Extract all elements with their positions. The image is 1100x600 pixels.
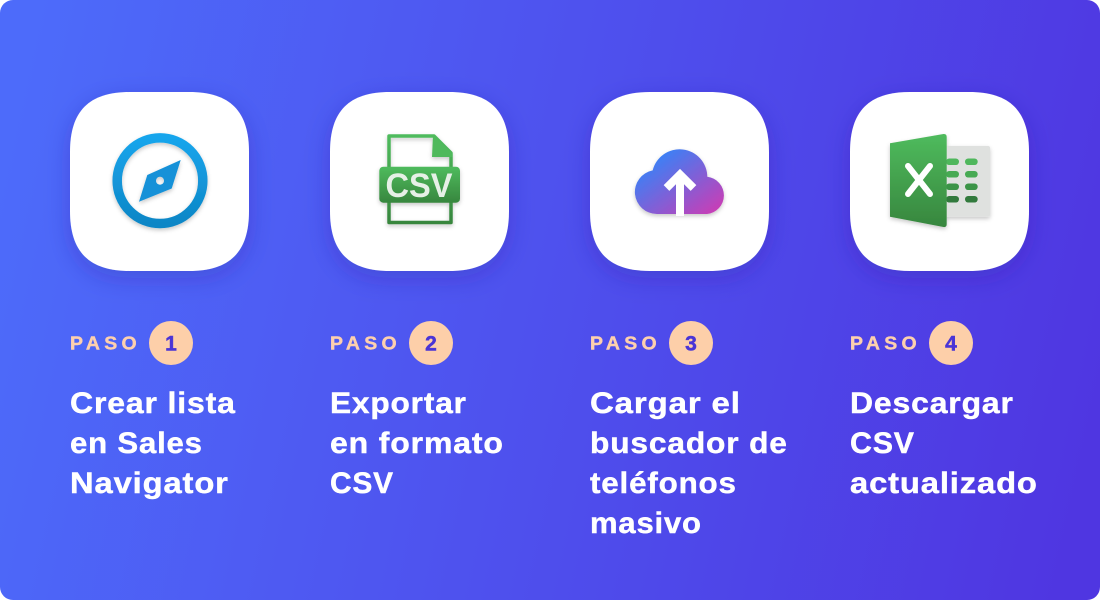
number badge 1: 1 [165,332,177,356]
icon: csv file [379,135,460,222]
number badge 4: 4 [945,332,957,356]
icon: compass [117,138,203,224]
number badge 3 [669,321,713,365]
step text 2 [330,387,504,500]
step 3 [590,92,788,540]
number badge 4 [929,321,973,365]
icon tile 1 [70,92,249,271]
step text 3: buscador de [590,427,788,460]
step text 3 [590,387,788,540]
step text 1 [70,387,236,500]
step label 1: PASO [70,334,141,354]
step text 3: masivo [590,507,702,540]
icon tile 3 [590,92,769,271]
step text 4: Descargar [850,387,1014,420]
icon: cloud upload [635,149,724,216]
step text 2: en formato [330,427,504,460]
number badge 3: 3 [685,332,697,356]
number badge 2 [409,321,453,365]
step text 4: actualizado [850,467,1038,500]
step text 3: Cargar el [590,387,741,420]
step text 3: teléfonos [590,467,737,500]
step text 2: CSV [330,467,394,500]
step text 1: Crear lista [70,387,236,420]
step text 1: Navigator [70,467,229,500]
step 1 [70,92,249,500]
icon tile 2 [330,92,509,271]
step 2 [330,92,509,500]
step text 1: en Sales [70,427,203,460]
number badge 2: 2 [425,332,437,356]
step label 4: PASO [850,334,921,354]
step label 3: PASO [590,334,661,354]
step text 2: Exportar [330,387,467,420]
icon: csv file: CSV [386,167,453,205]
step text 4 [850,387,1038,500]
icon: excel [890,134,990,227]
number badge 1 [149,321,193,365]
step label 2: PASO [330,334,401,354]
icon tile 4 [850,92,1029,271]
step 4 [850,92,1038,500]
step text 4: CSV [850,427,915,460]
